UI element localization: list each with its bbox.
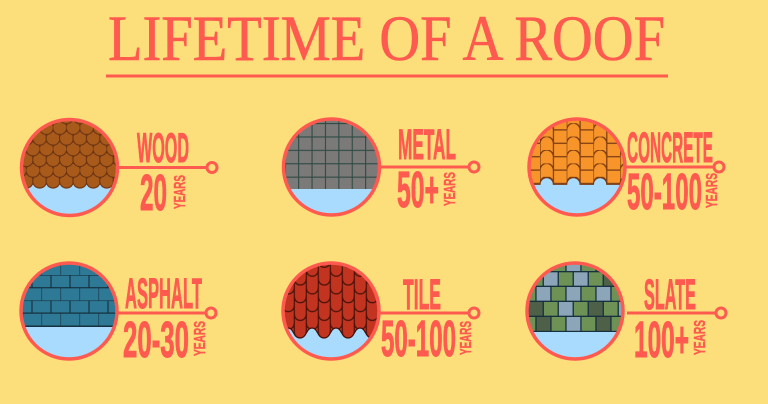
panel: tile: TILE (403, 271, 441, 319)
panel: wood: WOOD (137, 124, 189, 171)
unit: years: YEARS (442, 172, 459, 206)
connector (380, 162, 479, 172)
panel: metal: 50+ (397, 161, 439, 218)
panel: slate: 100+ (634, 311, 689, 368)
panel: asphalt (20, 261, 216, 368)
connector (118, 162, 217, 172)
panel: metal: METAL (398, 121, 456, 169)
unit: years: YEARS (172, 175, 189, 209)
unit: years: YEARS (704, 173, 721, 208)
panel: tile (281, 261, 480, 361)
panel: wood (20, 118, 217, 221)
icon: clay tiles (281, 261, 381, 361)
panel: wood: 20 (140, 164, 167, 221)
title: LIFETIME OF A ROOF (108, 3, 665, 75)
unit: years: YEARS (192, 321, 209, 356)
panel: slate (525, 261, 728, 361)
panel: metal (282, 117, 479, 218)
icon: metal roof (282, 117, 382, 217)
connector (118, 308, 216, 318)
unit: years: YEARS (692, 320, 709, 355)
connector (625, 162, 724, 172)
connector (627, 308, 726, 318)
icon: concrete tiles (527, 117, 627, 217)
panel: concrete (520, 117, 724, 220)
connector (380, 308, 479, 318)
icon: wood shingles (20, 118, 127, 220)
title underline (106, 74, 668, 78)
panel: tile: 50-100 (381, 310, 456, 367)
number: 20-30: 20-30 (123, 311, 189, 368)
unit: years: YEARS (458, 321, 475, 355)
icon: asphalt shingles (20, 261, 120, 361)
icon: slate tiles (525, 261, 625, 361)
text: ASPHALT (125, 270, 202, 318)
